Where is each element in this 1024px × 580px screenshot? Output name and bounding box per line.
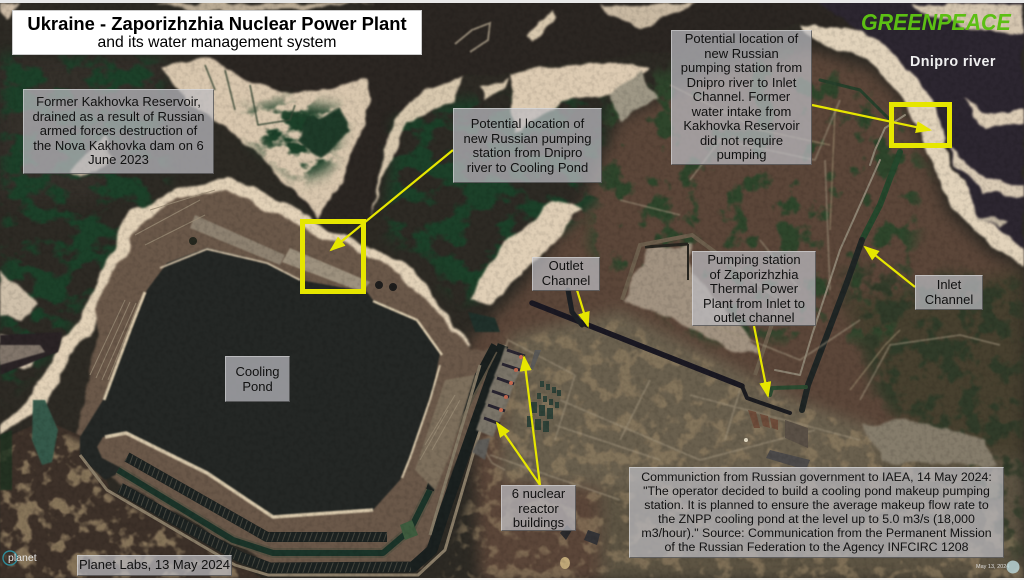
canals [80, 345, 505, 575]
callout: former Kakhovka Reservoir: the Nova Kakhovka dam on 6 [33, 138, 204, 153]
callout: pumping station to Inlet Channel [671, 30, 812, 165]
label: Dnipro river: Dnipro river [910, 54, 996, 70]
callout: thermal power plant pumping station: outlet channel [714, 310, 794, 325]
outlet channel [532, 80, 905, 413]
callout: IAEA communication: the ZNPP cooling pond at the level up to 5.0 m3/s (18,000 [658, 512, 975, 526]
levee brown [75, 188, 505, 570]
callout: thermal power plant pumping station: of Zaporizhzhia [710, 267, 798, 282]
west levee stripes [90, 190, 460, 460]
callout: pumping station to Cooling Pond: river to Cooling Pond [467, 160, 588, 175]
west sand specks [0, 270, 40, 368]
callout: thermal power plant pumping station: Pumping station [707, 252, 801, 267]
callout: IAEA communication [629, 467, 1004, 558]
river dark [205, 0, 1024, 260]
callout: thermal power plant pumping station [692, 251, 816, 326]
callout: former Kakhovka Reservoir: armed forces destruction of [40, 123, 197, 138]
callout: IAEA communication: m3/hour)." Source: Communication from the Permanent Mission [641, 526, 992, 540]
callout: Inlet Channel: Channel [925, 292, 973, 307]
callout: pumping station to Inlet Channel: pumping [717, 147, 766, 162]
sand bars, reservoir bed [160, 57, 371, 220]
callout: IAEA communication: "The operator decided to build a cooling pond makeup pumping [643, 484, 990, 498]
sandy tracks [670, 85, 900, 390]
callout: former Kakhovka Reservoir: Former Kakhovka Reservoir, [36, 94, 201, 109]
small lake [32, 400, 58, 465]
plant site light roads [478, 100, 1000, 500]
callout: Cooling Pond [225, 356, 290, 402]
icon: Planet Labs watermark: planet [8, 552, 37, 564]
reservoir outer sand curve [0, 176, 470, 435]
callout: Cooling Pond: Cooling [235, 364, 280, 379]
lower-left land [0, 420, 262, 578]
callout: former Kakhovka Reservoir: June 2023 [88, 152, 149, 167]
dark circles [375, 281, 383, 289]
callout: reactor buildings: reactor [518, 501, 559, 516]
pond shore sand [104, 249, 442, 517]
callout: thermal power plant pumping station: Plant from Inlet to [703, 296, 805, 311]
callout: Outlet Channel: Channel [542, 273, 590, 288]
callout: former Kakhovka Reservoir [23, 89, 214, 174]
callout: reactor buildings: 6 nuclear [512, 486, 565, 501]
credit: Planet Labs [77, 555, 232, 576]
cooling sprinkler basins [527, 381, 561, 432]
callout: pumping station to Inlet Channel: Potential location of [685, 31, 798, 46]
callout: former Kakhovka Reservoir: drained as a result of Russian [32, 109, 204, 124]
callout: IAEA communication: of the Russian Federation to the Agency INFCIRC 1208 [665, 540, 968, 554]
logo: Greenpeace: GREENPEACE [861, 9, 1011, 35]
west vegetation [0, 55, 165, 400]
callout: pumping station to Cooling Pond: station from Dnipro [473, 145, 582, 160]
callout: IAEA communication: station. It is planned to ensure the average makeup flow rate to [644, 498, 989, 512]
plant lagoon [468, 312, 500, 332]
callout: pumping station to Cooling Pond: Potential location of [471, 116, 584, 131]
source date stamp: May 13, 2024 [976, 564, 1009, 570]
callout: Inlet Channel [915, 275, 983, 310]
callout: thermal power plant pumping station: Thermal Power [710, 281, 798, 296]
land vegetation, mottled [590, 50, 925, 340]
top and bottom page strip [0, 0, 1024, 3]
callout: reactor buildings [501, 485, 576, 531]
callout: Outlet Channel: Outlet [549, 258, 583, 273]
heading: Ukraine - Zaporizhzhia Nuclear Power Plant [27, 13, 407, 34]
callout: pumping station to Cooling Pond: new Russian pumping [464, 131, 591, 146]
cooling pond [80, 248, 440, 517]
levee right stripes [415, 375, 475, 490]
west dark inlet [0, 332, 62, 375]
callout: pumping station to Inlet Channel: Kakhovka Reservoir [683, 118, 800, 133]
sand vegetation [245, 100, 345, 180]
callout: pumping station to Inlet Channel: pumping station from [681, 60, 802, 75]
callout: Inlet Channel: Inlet [937, 277, 961, 292]
title [12, 10, 422, 55]
levee light area [282, 248, 370, 292]
callout: pumping station to Inlet Channel: Channel. Former [693, 89, 790, 104]
small hook sand bar [455, 23, 490, 52]
subheading: and its water management system [98, 34, 336, 51]
inlet channel [862, 152, 900, 240]
callout: Outlet Channel [532, 257, 600, 291]
callout: Cooling Pond: Pond [242, 379, 273, 394]
callout: pumping station to Inlet Channel: water intake from [692, 104, 791, 119]
plant and lower land specks [440, 320, 1024, 580]
reactor buildings [472, 348, 525, 460]
callout: pumping station to Inlet Channel: did not require [700, 133, 783, 148]
callout: pumping station to Inlet Channel: new Russian [704, 46, 779, 61]
ash pond [625, 245, 765, 355]
Dnipro sand bars [912, 4, 1024, 35]
thermal plant buildings [748, 410, 778, 430]
callout: reactor buildings: buildings [513, 515, 564, 530]
callout: pumping station to Inlet Channel: Dnipro river to Inlet [687, 75, 796, 90]
credit: Planet Labs: Planet Labs, 13 May 2024 [79, 557, 230, 572]
switchyard [865, 418, 995, 465]
plant bottom lots [560, 525, 572, 540]
callout: pumping station to Cooling Pond [453, 108, 602, 183]
Dnipro sand arc [800, 26, 1024, 268]
callout: IAEA communication: Communiction from Russian government to IAEA, 14 May 2024: [641, 470, 992, 484]
